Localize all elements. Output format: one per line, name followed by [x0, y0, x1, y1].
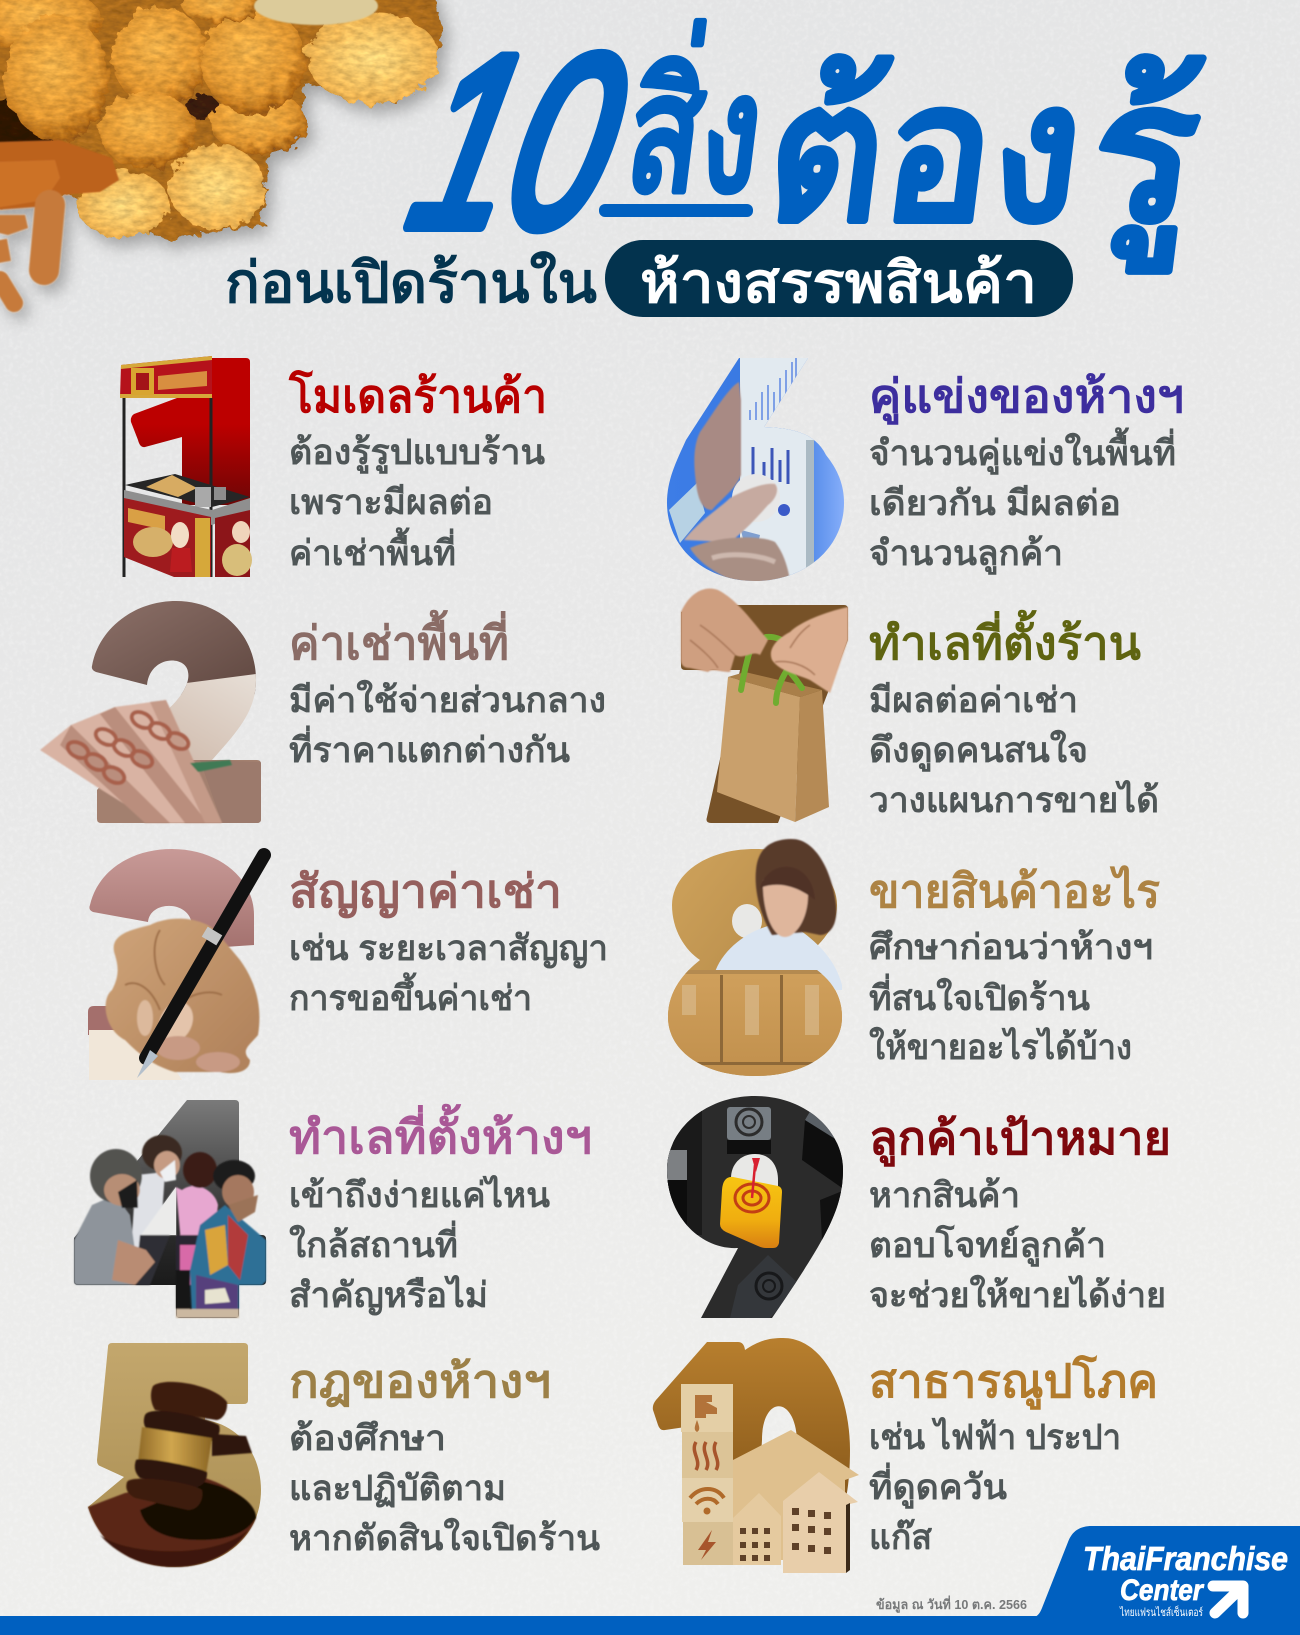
item 6 text: คู่แข่งของห้างฯ — [869, 370, 1184, 425]
item 4 text — [289, 1103, 592, 1316]
item 5 text: หากตัดสินใจเปิดร้าน — [289, 1517, 600, 1558]
item 9: target cube on numeral 9 — [665, 1095, 845, 1318]
item 1: food stall on numeral 1 — [120, 356, 252, 577]
item 4 text: ใกล้สถานที่ — [289, 1220, 458, 1265]
item 6 text: จำนวนคู่แข่งในพื้นที่ — [869, 427, 1176, 475]
item 1 text: ต้องรู้รูปแบบร้าน — [289, 433, 545, 474]
item 10 text: ที่ดูดควัน — [869, 1462, 1007, 1509]
item 8 text: ศึกษาก่อนว่าห้างฯ — [869, 928, 1153, 967]
source note: ข้อมูล ณ วันที่ 10 ต.ค. 2566 — [876, 1595, 1027, 1613]
item 3: hand writing on numeral 3 — [88, 849, 264, 1080]
item 9 text — [869, 1112, 1171, 1315]
logo: ThaiFranchise Center: ไทยแฟรนไชส์เซ็นเตอร์ — [1119, 1605, 1203, 1619]
item 4 text: ทำเลที่ตั้งห้างฯ — [289, 1103, 592, 1163]
item 8: woman and boxes on numeral 8 — [660, 839, 850, 1080]
item 4: people on numeral 4 — [74, 1100, 266, 1318]
item 5 text: กฎของห้างฯ — [289, 1355, 551, 1407]
item 3 text: สัญญาค่าเช่า — [289, 865, 562, 918]
item 3 text: การขอขึ้นค่าเช่า — [289, 972, 532, 1018]
item 6 text: จำนวนลูกค้า — [869, 534, 1063, 575]
item 6 text: เดียวกัน มีผลต่อ — [869, 484, 1121, 523]
item 7 text: ทำเลที่ตั้งร้าน — [869, 609, 1142, 669]
item 10 text — [869, 1354, 1158, 1557]
item 7 text: ดึงดูดคนสนใจ — [869, 729, 1088, 772]
item 2 text: ที่ราคาแตกต่างกัน — [289, 725, 570, 770]
item 1 text: ค่าเช่าพื้นที่ — [289, 527, 456, 573]
title: 10 สิ่งต้องรู้: 10 — [391, 4, 646, 278]
title: 10 สิ่งต้องรู้: สิ่ง — [618, 22, 775, 227]
item 1 text — [288, 369, 547, 573]
item 7 text — [869, 609, 1159, 820]
title: 10 สิ่งต้องรู้ — [391, 4, 1212, 278]
logo: ThaiFranchise Center: Center — [1120, 1574, 1205, 1607]
item 10 text: แก๊ส — [869, 1518, 933, 1557]
item 5: gavel on numeral 5 — [88, 1343, 261, 1567]
subtitle: ห้างสรรพสินค้า — [640, 251, 1037, 314]
item 9 text: ตอบโจทย์ลูกค้า — [869, 1224, 1106, 1267]
title: 10 สิ่งต้องรู้: ต้อง — [756, 45, 1095, 262]
item 2 text: มีค่าใช้จ่ายส่วนกลาง — [289, 679, 606, 720]
item 8 text — [869, 865, 1160, 1067]
image: fried fish snacks, top left — [0, 0, 443, 303]
item 5 text — [289, 1355, 600, 1558]
bottom bar — [0, 1616, 1300, 1635]
item 10 text: สาธารณูปโภค — [869, 1354, 1158, 1410]
item 6: hands and tablet on numeral 6 — [667, 355, 844, 585]
item 3 text — [289, 865, 608, 1018]
item 9 text: จะช่วยให้ขายได้ง่าย — [869, 1274, 1166, 1315]
item 8 text: ที่สนใจเปิดร้าน — [869, 973, 1090, 1018]
item 5 text: และปฏิบัติตาม — [289, 1469, 506, 1508]
item 10 text: เช่น ไฟฟ้า ประปา — [869, 1416, 1121, 1457]
subtitle — [225, 240, 1073, 317]
item 8 text: ให้ขายอะไรได้บ้าง — [869, 1026, 1132, 1067]
item 9 text: ลูกค้าเป้าหมาย — [869, 1112, 1171, 1167]
item 9 text: หากสินค้า — [869, 1176, 1020, 1215]
item 2 text — [289, 609, 606, 770]
logo: ThaiFranchise Center — [1033, 1526, 1300, 1619]
item 4 text: สำคัญหรือไม่ — [289, 1274, 488, 1316]
item 8 text: ขายสินค้าอะไร — [869, 865, 1160, 917]
item 10: utility blocks and houses on numeral 10 — [653, 1338, 859, 1573]
title: 10 สิ่งต้องรู้: รู้ — [1078, 45, 1212, 271]
item 4 text: เข้าถึงง่ายแค่ไหน — [289, 1174, 550, 1215]
item 5 text: ต้องศึกษา — [289, 1419, 446, 1458]
item 7: shopping bag on numeral 7 — [681, 588, 848, 823]
item 1 text: โมเดลร้านค้า — [288, 369, 547, 422]
item 7 text: วางแผนการขายได้ — [869, 779, 1159, 820]
item 1 text: เพราะมีผลต่อ — [289, 483, 493, 522]
subtitle: ก่อนเปิดร้านใน — [225, 250, 597, 314]
item 3 text: เช่น ระยะเวลาสัญญา — [289, 929, 608, 969]
item 6 text — [869, 370, 1184, 575]
item 2: banknotes on numeral 2 — [40, 595, 265, 825]
item 2 text: ค่าเช่าพื้นที่ — [289, 609, 509, 669]
item 7 text: มีผลต่อค่าเช่า — [869, 681, 1078, 720]
